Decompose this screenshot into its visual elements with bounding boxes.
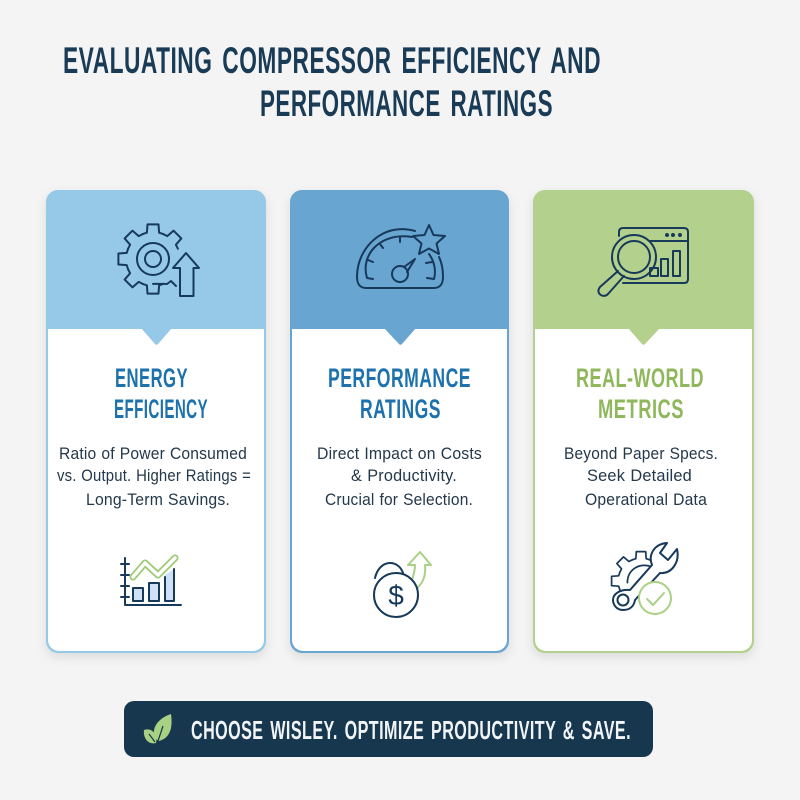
- header notch: [141, 328, 172, 345]
- body text: Seek Detailed: [587, 466, 692, 485]
- heading: REAL-WORLD: [576, 363, 704, 393]
- heading: RATINGS: [360, 394, 441, 424]
- header notch: [628, 328, 660, 345]
- icon: bar chart with trend line: [121, 558, 181, 605]
- body text: Beyond Paper Specs.: [564, 444, 718, 463]
- title: PERFORMANCE RATINGS: [260, 83, 553, 124]
- heading: EFFICIENCY: [114, 394, 208, 424]
- callout banner: [124, 701, 653, 757]
- body text: Operational Data: [585, 490, 707, 509]
- icon: leaves: [144, 714, 172, 743]
- body text: Crucial for Selection.: [325, 490, 473, 509]
- panel: performance ratings: [290, 190, 509, 653]
- body text: Long-Term Savings.: [86, 490, 230, 509]
- heading: METRICS: [598, 394, 684, 424]
- heading: PERFORMANCE: [328, 363, 471, 393]
- body text: Direct Impact on Costs: [317, 444, 482, 463]
- heading: [114, 363, 208, 424]
- heading: ENERGY: [115, 363, 188, 393]
- icon: coins with up arrow: [374, 552, 431, 617]
- body text: & Productivity.: [351, 466, 457, 485]
- icon: gear, wrench and check: [612, 543, 678, 614]
- header notch: [384, 328, 416, 345]
- icon: coins with up arrow: $: [388, 580, 404, 611]
- heading: [328, 363, 471, 424]
- icon: gear with up arrow: [118, 224, 199, 296]
- body text: Ratio of Power Consumed: [59, 444, 247, 463]
- card background: [533, 190, 754, 653]
- body text: vs. Output. Higher Ratings =: [57, 466, 251, 485]
- body text: [564, 444, 718, 509]
- icon: magnifier over dashboard: [598, 228, 688, 296]
- banner background: [124, 701, 653, 757]
- panel: real-world metrics: [533, 190, 754, 653]
- panel: energy efficiency: [46, 190, 266, 653]
- card background: [46, 190, 266, 653]
- heading: [576, 363, 704, 424]
- icon: speedometer with star: [357, 225, 445, 288]
- card background: [290, 190, 509, 653]
- title: [63, 40, 601, 124]
- body text: [57, 444, 251, 509]
- body text: [317, 444, 482, 509]
